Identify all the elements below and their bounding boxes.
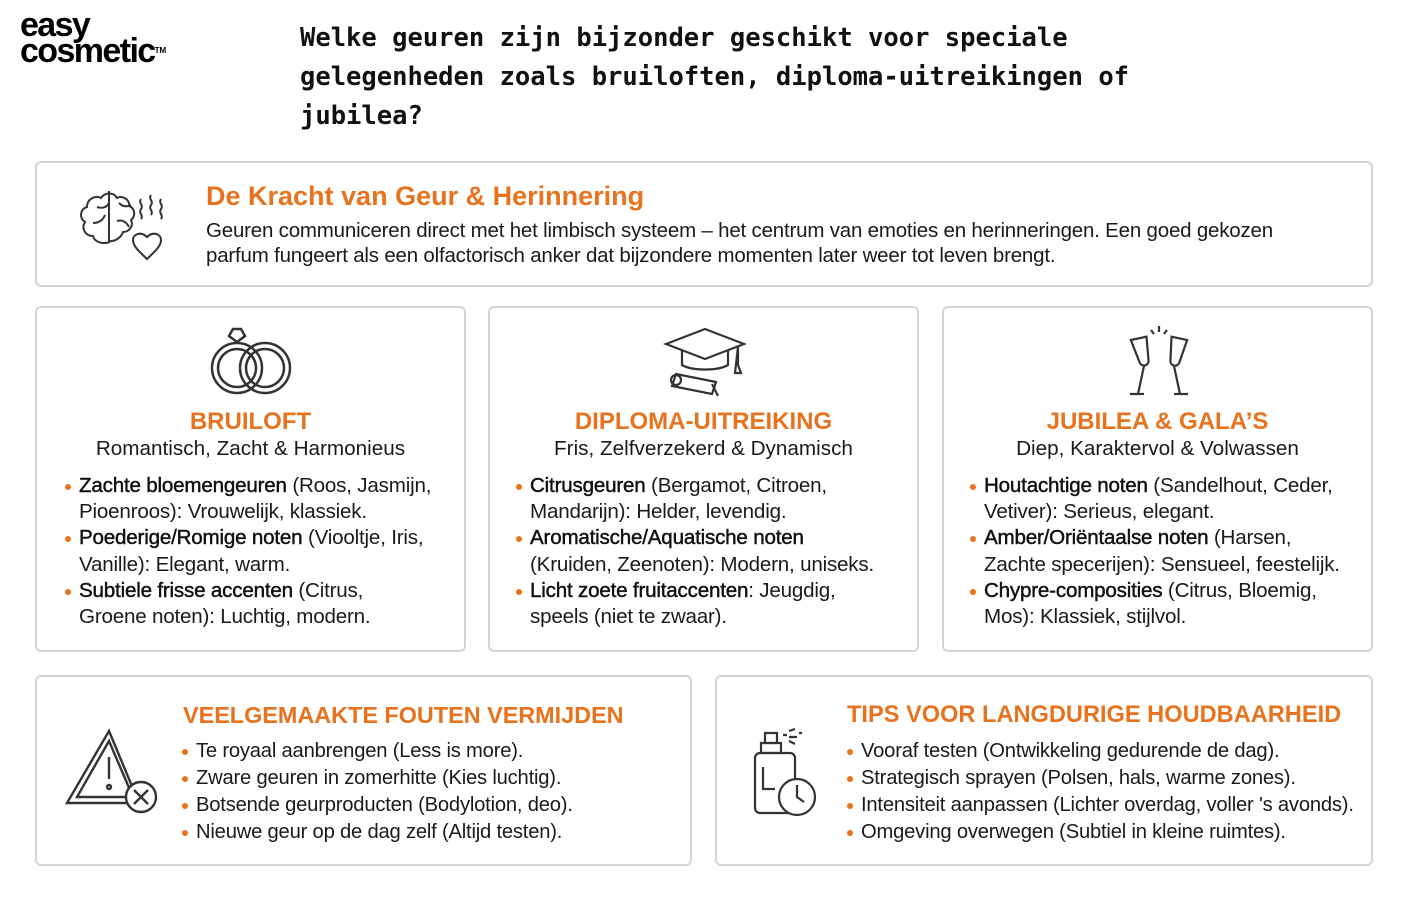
bullets: Chypre-composities (Citrus, Bloemig, [984, 579, 1317, 602]
title [300, 23, 1129, 131]
panel: kracht van geur [35, 161, 1373, 287]
panel: diploma [488, 306, 919, 652]
bullets: Vetiver): Serieus, elegant. [984, 500, 1214, 523]
heading: JUBILEA & GALA’S [1047, 408, 1268, 435]
heading: BRUILOFT [190, 408, 311, 435]
bullets: Vanille): Elegant, warm. [79, 553, 290, 576]
bullets [970, 474, 1340, 628]
bullets: Vooraf testen (Ontwikkeling gedurende de dag). [861, 740, 1279, 762]
icon: rings [210, 328, 292, 394]
bullets [65, 474, 431, 628]
bullets: Poederige/Romige noten (Viooltje, Iris, [79, 526, 423, 549]
panel: fouten [35, 675, 692, 866]
logo: easy [20, 6, 89, 44]
title: jubilea? [300, 101, 423, 131]
heading: DIPLOMA-UITREIKING [575, 408, 832, 435]
subtitle: Fris, Zelfverzekerd & Dynamisch [554, 437, 853, 460]
panel: jubilea [942, 306, 1373, 652]
title: gelegenheden zoals bruiloften, diploma-uitreikingen of [300, 62, 1129, 92]
bullets: Licht zoete fruitaccenten: Jeugdig, [530, 579, 836, 602]
bullets: Te royaal aanbrengen (Less is more). [196, 740, 523, 762]
bullets: Groene noten): Luchtig, modern. [79, 605, 370, 628]
subtitle: Romantisch, Zacht & Harmonieus [96, 437, 405, 460]
subtitle: Diep, Karaktervol & Volwassen [1016, 437, 1299, 460]
logo: cosmeticTM [20, 32, 166, 70]
panel: bruiloft [35, 306, 466, 652]
bullets: Nieuwe geur op de dag zelf (Altijd testen). [196, 821, 562, 843]
icon: champagne glasses [1129, 326, 1189, 396]
bullets: Zware geuren in zomerhitte (Kies luchtig). [196, 767, 561, 789]
bullets: Zachte bloemengeuren (Roos, Jasmijn, [79, 474, 431, 497]
bullets: Aromatische/Aquatische noten [530, 526, 804, 549]
bullets: Omgeving overwegen (Subtiel in kleine ruimtes). [861, 821, 1286, 843]
bullets [516, 474, 874, 628]
bullets: Pioenroos): Vrouwelijk, klassiek. [79, 500, 367, 523]
panel: tips [715, 675, 1373, 866]
bullets [847, 740, 1354, 843]
title: Welke geuren zijn bijzonder geschikt voor speciale [300, 23, 1068, 53]
bullets: Amber/Oriëntaalse noten (Harsen, [984, 526, 1291, 549]
bullets: Mos): Klassiek, stijlvol. [984, 605, 1186, 628]
icon: graduation cap [663, 328, 747, 396]
heading: VEELGEMAAKTE FOUTEN VERMIJDEN [183, 702, 624, 728]
bullets: Mandarijn): Helder, levendig. [530, 500, 786, 523]
bullets: Houtachtige noten (Sandelhout, Ceder, [984, 474, 1333, 497]
icon: warning [65, 728, 158, 814]
bullets: speels (niet te zwaar). [530, 605, 727, 628]
bullets: Subtiele frisse accenten (Citrus, [79, 579, 363, 602]
bullets: (Kruiden, Zeenoten): Modern, uniseks. [530, 553, 874, 576]
heading: TIPS VOOR LANGDURIGE HOUDBAARHEID [847, 702, 1341, 728]
logo [20, 6, 166, 70]
bullets: Intensiteit aanpassen (Lichter overdag, voller 's avonds). [861, 794, 1354, 816]
icon: perfume bottle with clock [754, 728, 816, 816]
bullets: Strategisch sprayen (Polsen, hals, warme zones). [861, 767, 1296, 789]
heading: De Kracht van Geur & Herinnering [206, 181, 644, 211]
text: Geuren communiceren direct met het limbisch systeem – het centrum van emoties en herinneringen. Een goed gekozen parfum fungeert als een olfactorisch anker dat bijzondere momenten later weer tot leven brengt. [206, 219, 1273, 267]
bullets: Botsende geurproducten (Bodylotion, deo). [196, 794, 573, 816]
icon: brain and heart [80, 191, 163, 260]
bullets: Zachte specerijen): Sensueel, feestelijk. [984, 553, 1340, 576]
bullets [182, 740, 573, 843]
bullets: Citrusgeuren (Bergamot, Citroen, [530, 474, 827, 497]
